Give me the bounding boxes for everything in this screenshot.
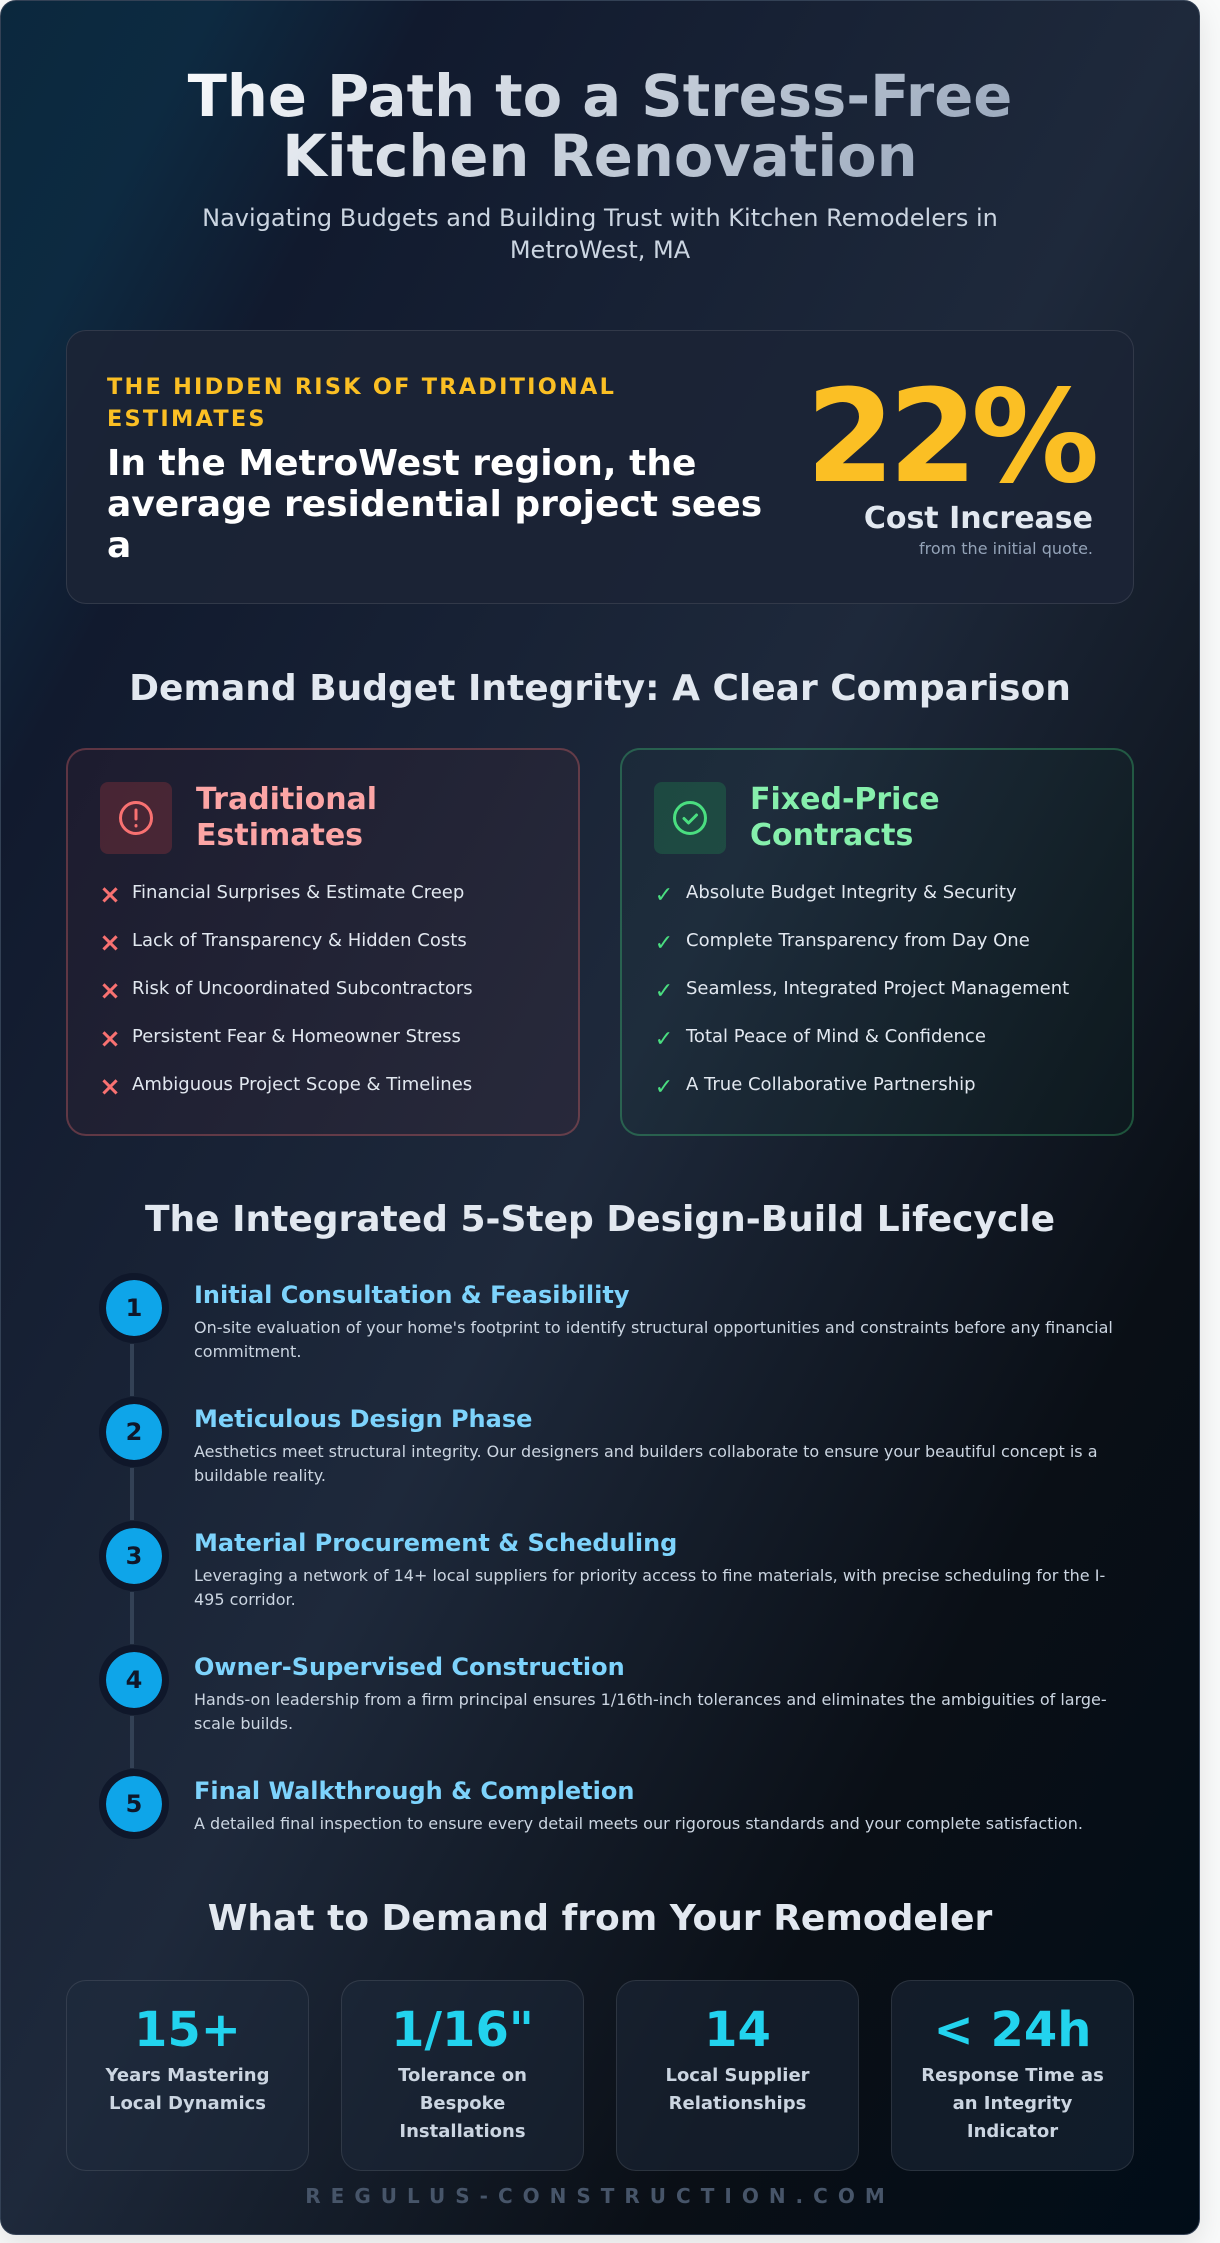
icon: alert [100, 782, 172, 854]
step 2 [99, 1397, 1098, 1485]
step number [99, 1769, 169, 1839]
title [180, 67, 1020, 187]
step title: Meticulous Design Phase [194, 1405, 532, 1433]
step number: 2 [126, 1418, 142, 1446]
stat number: 15+ [134, 2002, 241, 2058]
step number: 5 [126, 1790, 142, 1818]
subtitle [202, 204, 998, 264]
panel: fixed-price contracts [620, 748, 1134, 1136]
step description: buildable reality. [194, 1466, 326, 1485]
stat label: Years Mastering [106, 2065, 269, 2086]
step 3 [99, 1521, 1105, 1609]
panel: fixed-price contracts: ✓ [655, 883, 673, 908]
list item [655, 930, 1030, 956]
panel heading: Traditional [196, 782, 377, 817]
list item [655, 1074, 976, 1100]
big stat 22%: 22% [806, 363, 1093, 512]
step number [99, 1645, 169, 1715]
step number [99, 1397, 169, 1467]
panel: traditional estimates: × [99, 1072, 121, 1102]
step title: Initial Consultation & Feasibility [194, 1281, 629, 1309]
panel: fixed-price contracts: Complete Transparency from Day One [686, 930, 1030, 951]
panel heading [750, 782, 940, 853]
step title: Owner-Supervised Construction [194, 1653, 625, 1681]
kicker heading: THE HIDDEN RISK OF TRADITIONAL [107, 374, 616, 400]
stat label: Local Supplier [665, 2065, 810, 2086]
panel: traditional estimates: × [99, 880, 121, 910]
panel: hidden risk callout [66, 330, 1134, 604]
kicker heading [107, 374, 616, 432]
stat note: from the initial quote. [919, 539, 1093, 558]
stat label: an Integrity [953, 2093, 1072, 2114]
step description: Hands-on leadership from a firm principal ensures 1/16th-inch tolerances and eliminates the ambiguities of large- [194, 1690, 1107, 1709]
step number: 3 [126, 1542, 142, 1570]
step 5 [99, 1769, 1083, 1839]
step description: On-site evaluation of your home's footprint to identify structural opportunities and constraints before any financial [194, 1318, 1113, 1337]
subtitle: Navigating Budgets and Building Trust with Kitchen Remodelers in [202, 204, 998, 232]
panel: fixed-price contracts: Total Peace of Mind & Confidence [686, 1026, 986, 1047]
stat number: 14 [704, 2002, 771, 2058]
step description [194, 1690, 1107, 1733]
list item [99, 1072, 472, 1102]
step description: Aesthetics meet structural integrity. Our designers and builders collaborate to ensure your beautiful concept is a [194, 1442, 1098, 1461]
panel heading: Estimates [196, 818, 363, 853]
list item [99, 928, 467, 958]
list item [655, 882, 1017, 908]
stat label: Response Time as [921, 2065, 1104, 2086]
list item [99, 976, 473, 1006]
panel: fixed-price contracts: Seamless, Integrated Project Management [686, 978, 1069, 999]
step description: scale builds. [194, 1714, 293, 1733]
step description: Leveraging a network of 14+ local suppliers for priority access to fine materials, with precise scheduling for the I- [194, 1566, 1105, 1585]
callout statement: average residential project sees [107, 484, 762, 525]
title: The Path to a Stress-Free [188, 63, 1012, 130]
stat card: tolerance [341, 1980, 584, 2171]
stat label [105, 2065, 269, 2114]
step description [194, 1442, 1098, 1485]
callout statement [107, 443, 762, 566]
panel: fixed-price contracts: ✓ [655, 1075, 673, 1100]
panel: fixed-price contracts: ✓ [655, 1027, 673, 1052]
panel: traditional estimates: Persistent Fear & Homeowner Stress [132, 1026, 461, 1047]
panel: traditional estimates: × [99, 928, 121, 958]
footer website: REGULUS-CONSTRUCTION.COM [305, 2184, 895, 2208]
panel: traditional estimates: Lack of Transparency & Hidden Costs [132, 930, 467, 951]
list item [99, 1024, 461, 1054]
stat card: response [891, 1980, 1134, 2171]
stat label [665, 2065, 810, 2114]
panel heading [196, 782, 377, 853]
step description: 495 corridor. [194, 1590, 296, 1609]
stat label [921, 2065, 1104, 2142]
stat label: Relationships [669, 2093, 806, 2114]
stat label: Indicator [967, 2121, 1058, 2142]
step description: A detailed final inspection to ensure every detail meets our rigorous standards and your complete satisfaction. [194, 1814, 1083, 1833]
subtitle: MetroWest, MA [510, 236, 690, 264]
step 1 [99, 1273, 1113, 1361]
step title: Material Procurement & Scheduling [194, 1529, 677, 1557]
panel: fixed-price contracts: ✓ [655, 931, 673, 956]
list item [655, 978, 1069, 1004]
icon: check circle [654, 782, 726, 854]
step number: 1 [126, 1294, 142, 1322]
step description: commitment. [194, 1342, 301, 1361]
callout statement: a [107, 525, 131, 566]
step title: Final Walkthrough & Completion [194, 1777, 634, 1805]
panel heading: Fixed-Price [750, 782, 940, 817]
panel: traditional estimates: Risk of Uncoordinated Subcontractors [132, 978, 473, 999]
list item [99, 880, 464, 910]
panel: fixed-price contracts: A True Collaborative Partnership [686, 1074, 976, 1095]
step number [99, 1273, 169, 1343]
stat label: Bespoke [420, 2093, 505, 2114]
title: Kitchen Renovation [282, 123, 918, 190]
panel: traditional estimates: × [99, 1024, 121, 1054]
step 4 [99, 1645, 1107, 1733]
stat card: years [66, 1980, 309, 2171]
panel: fixed-price contracts: Absolute Budget Integrity & Security [686, 882, 1017, 903]
heading: what to demand: What to Demand from Your Remodeler [208, 1898, 992, 1939]
stat label: Installations [399, 2121, 526, 2142]
heading: lifecycle: The Integrated 5-Step Design-Build Lifecycle [145, 1199, 1055, 1240]
stat label: Local Dynamics [109, 2093, 266, 2114]
stat label: Tolerance on [398, 2065, 527, 2086]
panel: fixed-price contracts: ✓ [655, 979, 673, 1004]
stat card: suppliers [616, 1980, 859, 2171]
callout statement: In the MetroWest region, the [107, 443, 696, 484]
step number: 4 [126, 1666, 142, 1694]
panel: traditional estimates: Ambiguous Project Scope & Timelines [132, 1074, 472, 1095]
panel heading: Contracts [750, 818, 913, 853]
stat label: Cost Increase [864, 501, 1093, 536]
stat label [398, 2065, 527, 2142]
heading: comparison: Demand Budget Integrity: A Clear Comparison [129, 668, 1071, 709]
panel: traditional estimates: Financial Surprises & Estimate Creep [132, 882, 464, 903]
step description [194, 1566, 1105, 1609]
step number [99, 1521, 169, 1591]
kicker heading: ESTIMATES [107, 406, 267, 432]
panel: traditional estimates [66, 748, 580, 1136]
panel: traditional estimates: × [99, 976, 121, 1006]
stat number: < 24h [934, 2002, 1091, 2058]
step description [194, 1318, 1113, 1361]
stat number: 1/16" [391, 2002, 534, 2058]
list item [655, 1026, 986, 1052]
